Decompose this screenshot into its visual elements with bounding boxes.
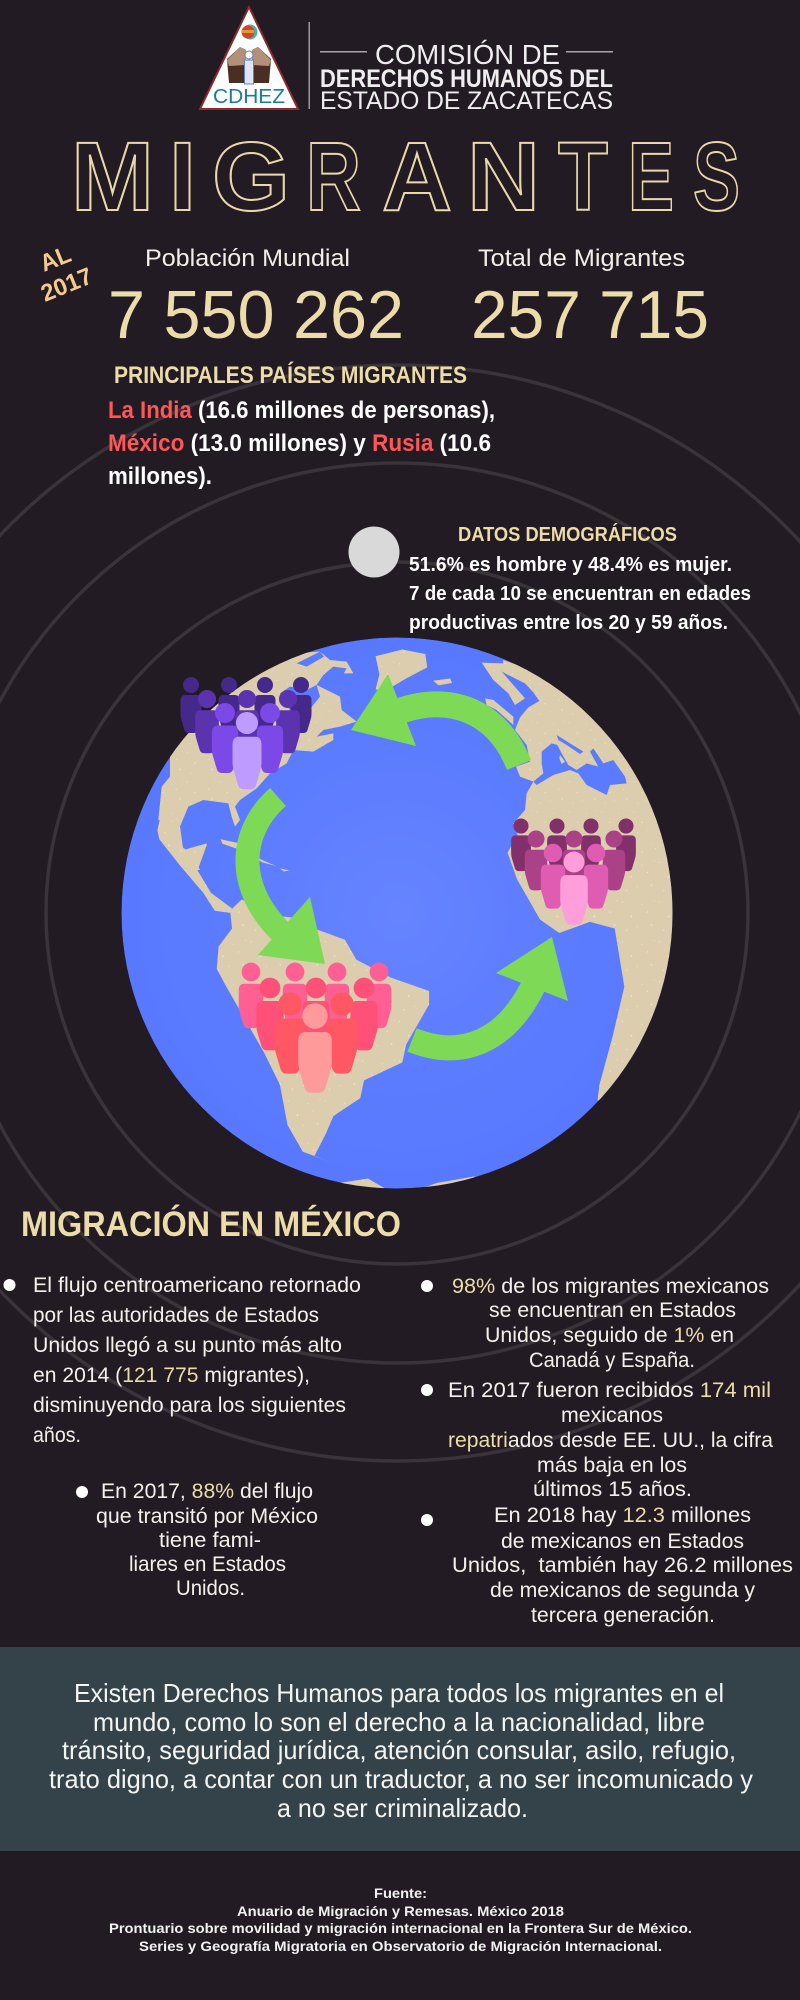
text block: 174 thousand: repatriados desde EE. UU., la cifra	[448, 1429, 773, 1452]
title: A	[382, 122, 452, 231]
text block: 12.3 million: de mexicanos de segunda y	[490, 1579, 755, 1602]
stat: world population: Población Mundial	[145, 245, 350, 272]
sources	[109, 1885, 692, 1954]
people group: South America	[239, 963, 391, 1093]
icon: logo triangle	[200, 7, 298, 109]
text block: 174 thousand: mexicanos	[561, 1404, 663, 1427]
arrow: South America to Africa	[412, 937, 568, 1048]
text block: 88 percent: En 2017, 88% del flujo	[101, 1480, 313, 1503]
block: main migrant countries: millones).	[108, 463, 212, 490]
logo name: DERECHOS HUMANOS DEL	[320, 65, 613, 93]
statement text: mundo, como lo son el derecho a la nacionalidad, libre	[93, 1707, 705, 1737]
date tag AL 2017	[36, 241, 96, 308]
arrow: Europe to North America	[351, 674, 519, 765]
text block: Central American flow: en 2014 (121 775 migrantes),	[33, 1364, 310, 1387]
block: demographic data: 7 de cada 10 se encuentran en edades	[409, 583, 751, 605]
land: Africa	[508, 794, 672, 1100]
block: main migrant countries: México (13.0 millones) y Rusia (10.6	[108, 430, 491, 457]
title: I	[169, 122, 196, 231]
text block: 174 thousand	[421, 1379, 773, 1501]
stat: total migrants: Total de Migrantes	[478, 245, 685, 272]
text block: 174 thousand: más baja en los	[537, 1454, 687, 1477]
text block: 12.3 million	[421, 1504, 793, 1627]
block: main migrant countries: La India (16.6 millones de personas),	[108, 397, 495, 424]
text block: 174 thousand: últimos 15 años.	[533, 1478, 692, 1501]
text block: Central American flow: años.	[33, 1424, 81, 1447]
block: main migrant countries	[108, 361, 495, 490]
logo name: COMISIÓN DE	[375, 39, 560, 70]
text block: 88 percent: Unidos.	[176, 1577, 245, 1600]
date tag AL 2017: AL	[36, 241, 75, 278]
title: S	[693, 122, 740, 231]
divider	[308, 22, 310, 109]
statement text: Existen Derechos Humanos para todos los migrantes en el	[74, 1678, 724, 1708]
text block: Central American flow: por las autoridades de Estados	[33, 1304, 319, 1327]
orbit rings	[0, 365, 800, 1461]
text block: 12.3 million: En 2018 hay 12.3 millones	[494, 1504, 751, 1527]
moon	[348, 526, 400, 578]
sources: Series y Geografía Migratoria en Observatorio de Migración Internacional.	[139, 1938, 662, 1954]
text block: Central American flow	[4, 1274, 361, 1447]
icon: hands and person	[227, 47, 271, 84]
title: R	[306, 122, 361, 231]
sources: Prontuario sobre movilidad y migración internacional en la Frontera Sur de México.	[109, 1920, 692, 1936]
text block: 88 percent: que transitó por México	[96, 1505, 318, 1528]
statement text: tránsito, seguridad jurídica, atención consular, asilo, refugio,	[62, 1735, 736, 1765]
title: M	[71, 122, 154, 231]
block: demographic data: 51.6% es hombre y 48.4% es mujer.	[409, 554, 732, 576]
title: E	[628, 122, 674, 231]
statement text: a no ser criminalizado.	[277, 1793, 528, 1823]
bullet	[4, 1279, 16, 1291]
text block: 88 percent	[76, 1480, 318, 1600]
title: G	[212, 122, 290, 231]
stat: total migrants	[471, 245, 709, 353]
text block: Central American flow: Unidos llegó a su punto más alto	[33, 1334, 342, 1357]
title: N	[467, 122, 540, 231]
text block: 12.3 million: de mexicanos en Estados	[501, 1530, 744, 1553]
text block: 98 percent: 98% de los migrantes mexicanos	[452, 1275, 769, 1298]
logo name: ESTADO DE ZACATECAS	[320, 87, 613, 115]
stat: world population: 7 550 262	[108, 277, 404, 353]
text block: 88 percent: liares en Estados	[129, 1553, 286, 1576]
logo name	[320, 39, 613, 115]
statement text: trato digno, a contar con un traductor, a no ser incomunicado y	[49, 1764, 753, 1794]
arrow: North America to South America	[247, 797, 325, 964]
text block: Central American flow: disminuyendo para los siguientes	[33, 1394, 346, 1417]
text block: 174 thousand: En 2017 fueron recibidos 174 mil	[448, 1379, 771, 1402]
heading: migration in Mexico: MIGRACIÓN EN MÉXICO	[21, 1204, 401, 1244]
bullet	[76, 1486, 88, 1498]
text block: 98 percent: se encuentran en Estados	[489, 1299, 736, 1322]
people group: North America	[180, 677, 312, 789]
text block: 88 percent: tiene fami-	[159, 1529, 261, 1552]
text block: 98 percent: Unidos, seguido de 1% en	[485, 1324, 734, 1347]
globe	[122, 638, 672, 1188]
icon: sun	[242, 24, 258, 40]
land: Europe and North Africa	[482, 660, 668, 859]
stat: world population	[108, 245, 404, 353]
text block: 12.3 million: tercera generación.	[531, 1604, 715, 1627]
block: demographic data	[409, 523, 751, 634]
land: Central America, South America, Greenland	[157, 650, 475, 1214]
heading: DATOS DEMOGRÁFICOS	[458, 523, 677, 546]
statement text	[49, 1678, 753, 1823]
bullet	[421, 1280, 433, 1292]
text block: 12.3 million: Unidos, también hay 26.2 millones	[452, 1554, 793, 1577]
bullet	[421, 1514, 433, 1526]
logo acronym: CDHEZ	[213, 86, 285, 108]
sources: Anuario de Migración y Remesas. México 2018	[237, 1903, 564, 1919]
title: T	[558, 122, 608, 231]
text block: 98 percent: Canadá y España.	[529, 1349, 695, 1372]
bullet	[421, 1384, 433, 1396]
block: demographic data: productivas entre los 20 y 59 años.	[409, 612, 728, 634]
logo CDHEZ	[200, 7, 613, 115]
land: North America	[158, 652, 357, 870]
heading: PRINCIPALES PAÍSES MIGRANTES	[114, 361, 467, 389]
people group: Africa	[511, 818, 636, 925]
text block: 98 percent	[421, 1275, 769, 1372]
panel: human rights statement	[0, 1647, 800, 1851]
sources: Fuente:	[374, 1885, 427, 1901]
date tag AL 2017: 2017	[37, 263, 96, 308]
stat: total migrants: 257 715	[471, 277, 709, 353]
ocean	[122, 638, 672, 1188]
text block: Central American flow: El flujo centroamericano retornado	[33, 1274, 361, 1297]
